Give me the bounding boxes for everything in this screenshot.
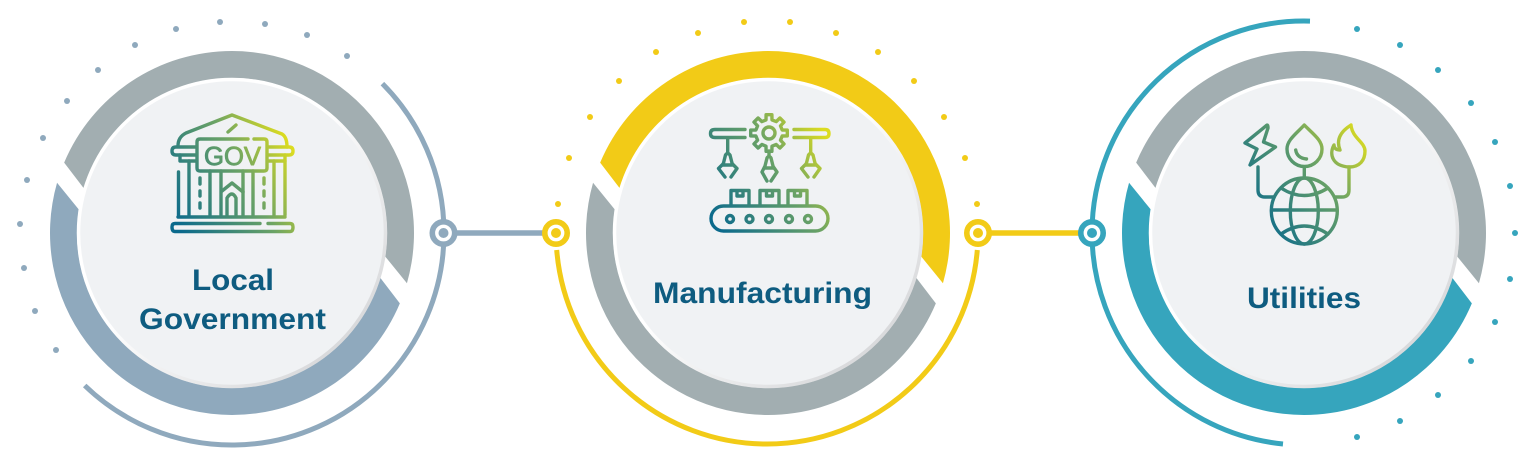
ring bottom segment: grey [586,183,936,415]
outer thin arc: utilities [1092,21,1310,444]
panel: local government [17,19,444,445]
inner disk [1150,80,1458,386]
ring top segment: grey [64,51,414,283]
ring bottom segment: blue [50,183,400,415]
heading: local government: Government [139,303,326,336]
heading: manufacturing: Manufacturing [653,277,872,310]
icon label: GOV: GOV [204,141,262,171]
heading: utilities: Utilities [1247,282,1361,315]
dotted arc: local government [17,19,350,353]
node: yellow connector start [545,222,567,244]
node: blue connector end [432,222,455,244]
outer thin arc: local government [85,84,444,445]
outer thin arc: manufacturing [557,250,977,444]
dotted arc: manufacturing [555,19,980,207]
ring bottom segment: teal [1122,183,1472,415]
heading: local government: Local [192,264,274,297]
dotted arc: utilities [1354,26,1518,440]
icon: government building [172,115,293,232]
node: yellow connector end [967,222,989,244]
ring top segment: yellow [600,51,950,283]
icon: assembly line [710,115,829,231]
panel: utilities [1092,21,1518,444]
ring top segment: grey [1136,51,1486,283]
inner disk [78,80,386,386]
inner disk [614,80,922,386]
connector line: manufacturing to utilities [978,230,1092,236]
panel: manufacturing [555,19,980,444]
node: teal connector start [1081,222,1103,244]
heading: local government [139,264,326,336]
connector line: local government to manufacturing [444,230,556,236]
icon: energy and globe [1245,125,1365,244]
